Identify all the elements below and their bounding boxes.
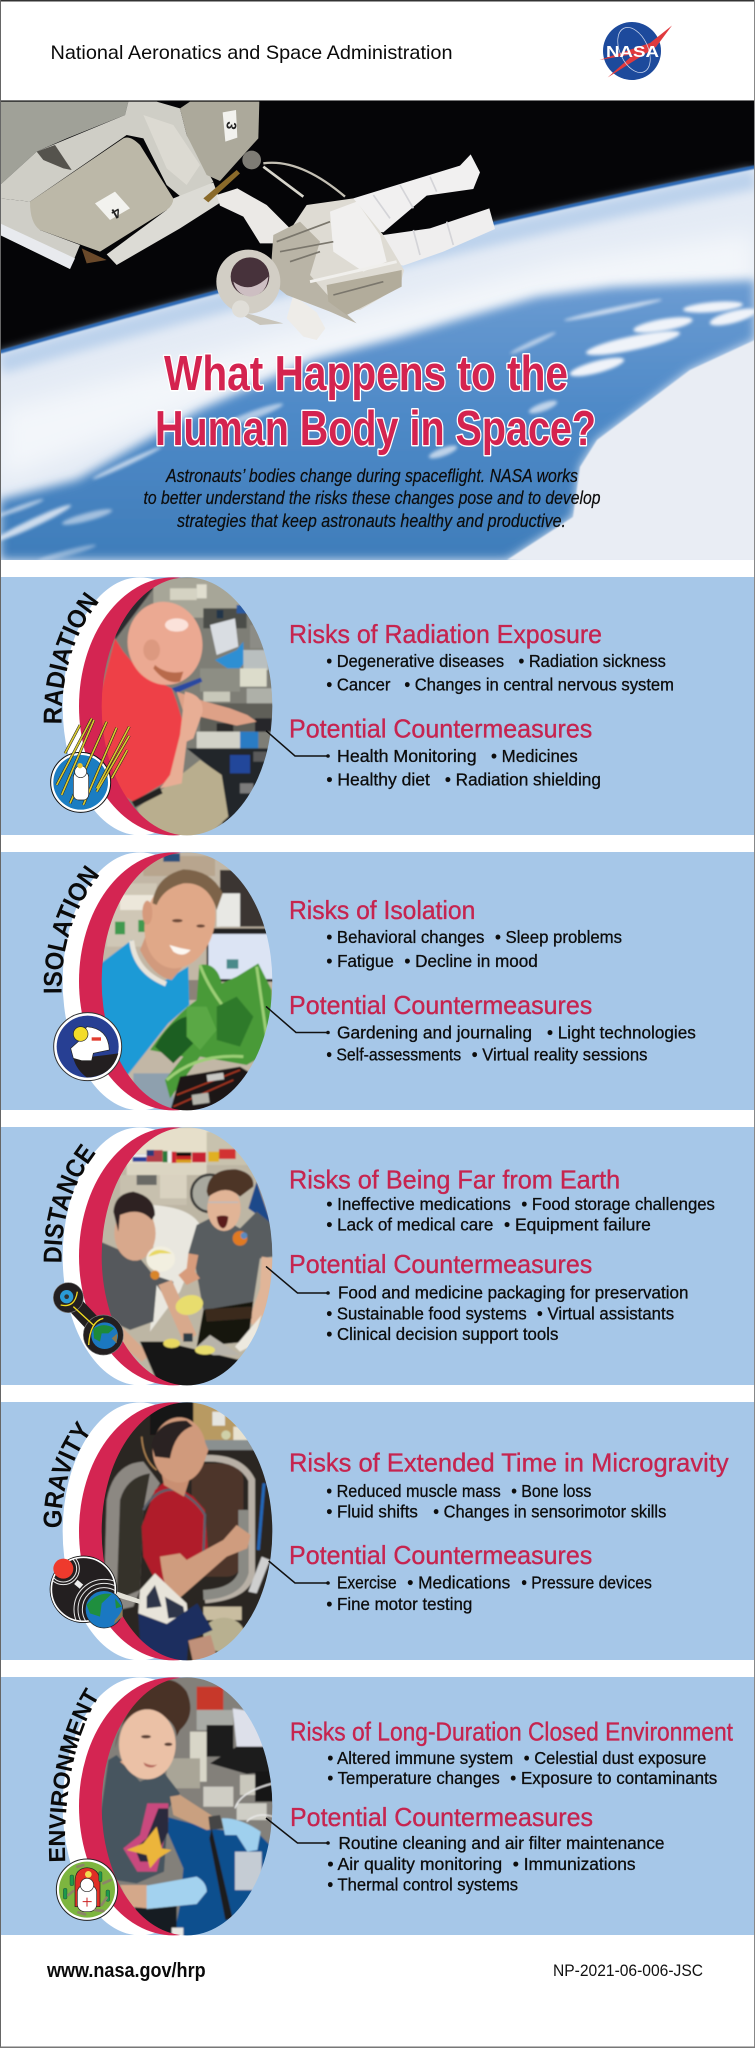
risks list: • Fatigue bbox=[326, 951, 394, 971]
countermeasures list: Routine cleaning and air filter maintenance bbox=[338, 1833, 664, 1853]
leader line bbox=[269, 1561, 330, 1585]
astronaut legs bbox=[350, 154, 495, 266]
panel: isolation bbox=[1, 852, 754, 1110]
intro text: to better understand the risks these changes pose and to develop bbox=[144, 487, 600, 508]
icon: NASA logo bbox=[600, 22, 672, 80]
countermeasures list: • Sustainable food systems bbox=[326, 1304, 527, 1324]
risks list: • Celestial dust exposure bbox=[524, 1748, 706, 1768]
countermeasures list: • Healthy diet bbox=[326, 770, 430, 790]
risks heading: Risks of Extended Time in Microgravity bbox=[289, 1447, 729, 1477]
countermeasures list bbox=[326, 1283, 688, 1344]
risks list: • Changes in central nervous system bbox=[404, 675, 674, 695]
risks heading: Risks of Isolation bbox=[289, 895, 475, 925]
risks list: • Reduced muscle mass bbox=[326, 1481, 501, 1501]
icon: gravity fields of Mars and Earth bbox=[50, 1556, 140, 1628]
risks list bbox=[326, 927, 622, 971]
risks list: • Behavioral changes bbox=[326, 927, 485, 947]
countermeasures list: • Virtual reality sessions bbox=[472, 1045, 648, 1065]
countermeasures list: • Medicines bbox=[491, 746, 578, 766]
risks heading: Risks of Radiation Exposure bbox=[289, 619, 602, 649]
risks list: • Food storage challenges bbox=[521, 1194, 715, 1214]
document number: NP-2021-06-006-JSC bbox=[553, 1962, 703, 1980]
space station and astronaut bbox=[0, 102, 495, 340]
footer bbox=[46, 1960, 703, 1982]
countermeasures list: • Fine motor testing bbox=[326, 1594, 472, 1614]
space station and astronaut: 3 bbox=[223, 120, 240, 131]
risks list: • Radiation sickness bbox=[518, 651, 666, 671]
countermeasures list: Health Monitoring bbox=[337, 746, 477, 766]
panel: radiation bbox=[1, 577, 754, 836]
risks list: • Ineffective medications bbox=[326, 1194, 511, 1214]
title: Human Body in Space? bbox=[155, 402, 596, 456]
label: DISTANCE: DISTANCE bbox=[44, 1143, 96, 1262]
risks list: • Lack of medical care bbox=[326, 1215, 493, 1235]
photo: astronaut on treadmill with crescent frame bbox=[43, 1402, 272, 1660]
icon: distance from Earth bbox=[53, 1283, 123, 1355]
icon: isolated astronaut bbox=[54, 1013, 122, 1081]
countermeasures list: • Air quality monitoring bbox=[327, 1854, 502, 1874]
photo: smiling astronaut with plants and crescent frame bbox=[44, 852, 272, 1110]
risks list: • Equipment failure bbox=[504, 1215, 651, 1235]
risks list: • Changes in sensorimotor skills bbox=[433, 1502, 667, 1522]
risks list: • Sleep problems bbox=[495, 927, 622, 947]
countermeasures list: • Pressure devices bbox=[521, 1573, 652, 1593]
countermeasures list bbox=[326, 1573, 652, 1614]
countermeasures list bbox=[326, 746, 601, 790]
label: ISOLATION: ISOLATION bbox=[44, 865, 100, 992]
risks list bbox=[326, 1194, 715, 1235]
icon: closed-environment microbes around astronaut bbox=[56, 1859, 118, 1920]
icon: radiation arrows over astronaut bbox=[51, 718, 129, 812]
countermeasures list: • Radiation shielding bbox=[445, 770, 601, 790]
countermeasures list: Food and medicine packaging for preservation bbox=[338, 1283, 688, 1303]
icon: NASA logo: NASA bbox=[606, 44, 659, 61]
countermeasures list: • Medications bbox=[407, 1573, 511, 1593]
countermeasures heading: Potential Countermeasures bbox=[289, 1540, 592, 1570]
title: What Happens to the bbox=[164, 347, 568, 401]
risks list: • Decline in mood bbox=[404, 951, 538, 971]
countermeasures list: Gardening and journaling bbox=[337, 1023, 532, 1043]
countermeasures heading: Potential Countermeasures bbox=[289, 990, 592, 1020]
label: GRAVITY: GRAVITY bbox=[43, 1420, 89, 1528]
label: ENVIRONMENT: ENVIRONMENT bbox=[48, 1687, 97, 1862]
countermeasures list bbox=[326, 1023, 696, 1065]
countermeasures list: • Virtual assistants bbox=[537, 1304, 674, 1324]
countermeasures heading: Potential Countermeasures bbox=[289, 714, 592, 744]
leader line bbox=[266, 1006, 330, 1034]
leader line bbox=[266, 1818, 330, 1845]
title bbox=[155, 347, 596, 456]
countermeasures heading: Potential Countermeasures bbox=[289, 1249, 592, 1279]
countermeasures list: • Thermal control systems bbox=[327, 1875, 518, 1895]
space station and astronaut: 4 bbox=[108, 203, 123, 222]
panel: environment bbox=[1, 1677, 754, 1936]
countermeasures heading: Potential Countermeasures bbox=[290, 1802, 593, 1832]
leader line bbox=[266, 731, 330, 758]
risks list: • Degenerative diseases bbox=[326, 651, 504, 671]
risks list bbox=[326, 651, 674, 695]
leader line bbox=[266, 1266, 330, 1295]
intro text: strategies that keep astronauts healthy and productive. bbox=[177, 510, 566, 531]
countermeasures list bbox=[327, 1833, 664, 1895]
risks list: • Exposure to contaminants bbox=[510, 1768, 718, 1788]
intro text bbox=[144, 465, 600, 531]
photo: astronaut at blue workstation with crescent frame bbox=[48, 1677, 272, 1936]
header bar bbox=[0, 0, 755, 80]
risks list bbox=[326, 1481, 667, 1522]
risks list: • Cancer bbox=[326, 675, 391, 695]
earth bbox=[0, 167, 755, 564]
risks heading: Risks of Being Far from Earth bbox=[289, 1165, 620, 1195]
risks list: • Altered immune system bbox=[327, 1748, 513, 1768]
risks list: • Temperature changes bbox=[327, 1768, 500, 1788]
risks list: • Fluid shifts bbox=[326, 1502, 418, 1522]
panel: distance bbox=[1, 1127, 754, 1386]
website url: www.nasa.gov/hrp bbox=[46, 1960, 206, 1982]
agency name: National Aeronatics and Space Administration bbox=[50, 42, 452, 64]
countermeasures list: • Self-assessments bbox=[326, 1045, 461, 1065]
countermeasures list: • Immunizations bbox=[513, 1854, 636, 1874]
countermeasures list: • Clinical decision support tools bbox=[326, 1324, 559, 1344]
photo: astronaut in red shirt with crescent frame bbox=[44, 577, 272, 836]
panel: gravity bbox=[1, 1402, 754, 1660]
countermeasures list: • Light technologies bbox=[547, 1023, 696, 1043]
risks list bbox=[327, 1748, 718, 1788]
risks list: • Bone loss bbox=[511, 1481, 592, 1501]
hero photo: spacewalking astronaut over Earth bbox=[0, 101, 755, 564]
countermeasures list: Exercise bbox=[337, 1573, 397, 1593]
photo: two astronauts with floating food and crescent frame bbox=[44, 1127, 272, 1386]
intro text: Astronauts’ bodies change during spaceflight. NASA works bbox=[165, 465, 578, 486]
label: RADIATION: RADIATION bbox=[44, 592, 99, 723]
